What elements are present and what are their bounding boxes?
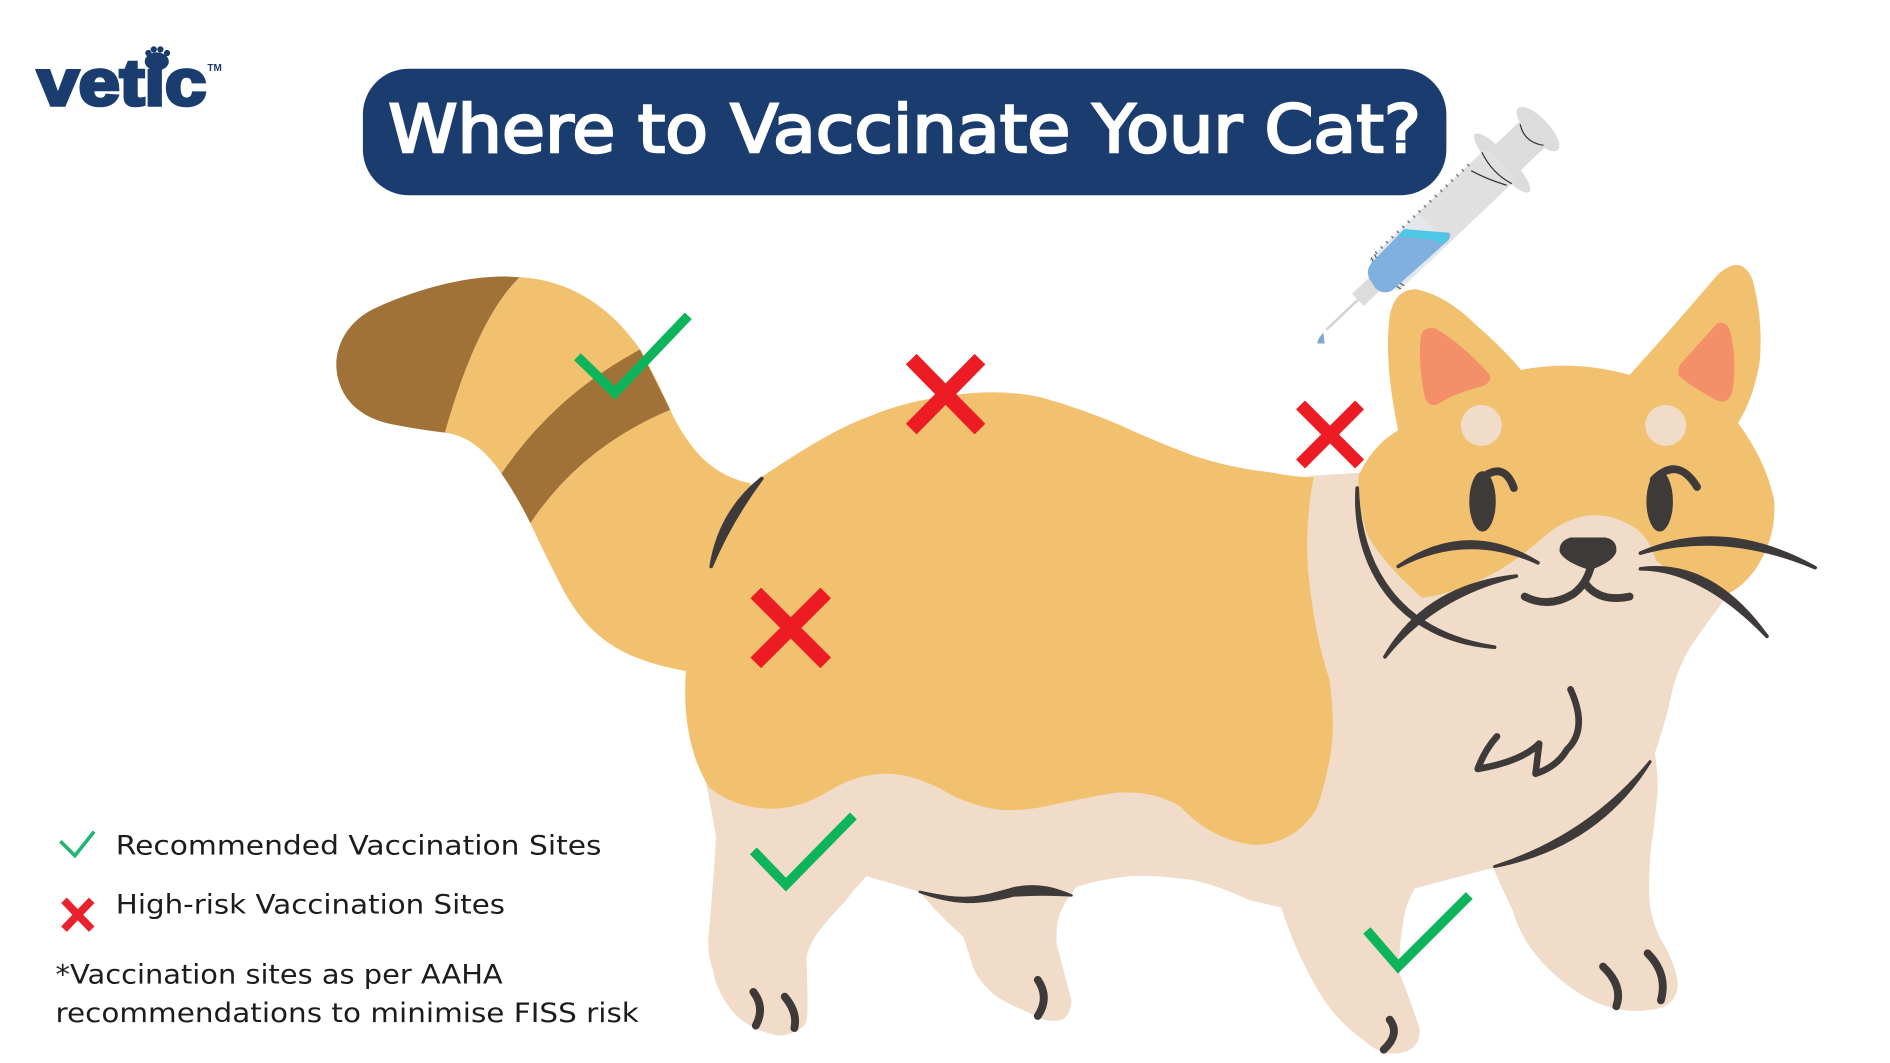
illustration: cat: [336, 265, 1815, 1054]
brow spots: [1461, 405, 1686, 446]
marks: recommended sites: [577, 316, 1469, 967]
legend: [56, 830, 639, 1029]
nose: [1560, 538, 1616, 569]
cat orange body: [685, 392, 1333, 845]
cat tail: [445, 277, 844, 671]
legend check icon: [60, 832, 94, 856]
mouth: [1525, 566, 1630, 602]
legend recommended label: Recommended Vaccination Sites: [116, 830, 602, 861]
icon: syringe: [1299, 93, 1573, 359]
toes: [753, 953, 1663, 1050]
footnote: [56, 959, 639, 1029]
legend cross icon: [64, 900, 92, 929]
footnote: *Vaccination sites as per AAHA: [56, 959, 503, 990]
legend high-risk label: High-risk Vaccination Sites: [116, 890, 505, 921]
logo: vetic: TM: [207, 63, 222, 74]
right inner ear: [1678, 322, 1734, 402]
tail brown band: [501, 350, 670, 523]
whiskers and neck line: [1357, 488, 1815, 657]
eyes: [1469, 471, 1673, 532]
eye brow strokes: [1481, 469, 1697, 488]
title banner: Where to Vaccinate Your Cat?: [388, 90, 1421, 168]
chest fur: [1478, 689, 1579, 774]
marks: high-risk sites: [756, 359, 1360, 663]
title banner: [363, 69, 1446, 195]
hind thigh line: [920, 886, 1072, 902]
cat cream body and legs: [705, 472, 1730, 1054]
footnote: recommendations to minimise FISS risk: [56, 998, 639, 1029]
tail brown tip: [336, 277, 520, 433]
logo: vetic: vetic: [37, 46, 206, 119]
cat head: [1358, 265, 1774, 598]
hip line: [711, 478, 762, 566]
belly line: [1495, 762, 1650, 867]
left inner ear: [1420, 328, 1490, 405]
